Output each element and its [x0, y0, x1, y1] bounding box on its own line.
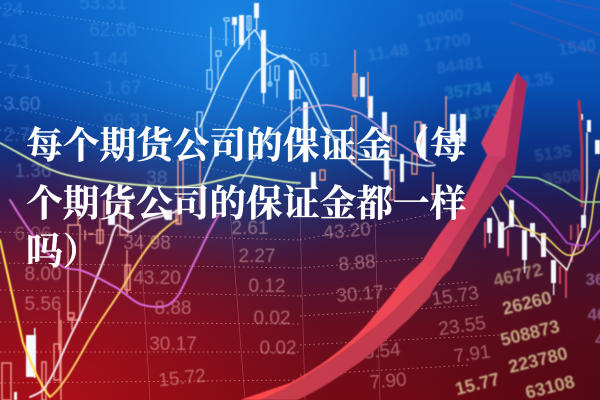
blurred blue table figures: 17700: [422, 30, 472, 55]
bright volume figures: 223780: [506, 343, 570, 377]
faint market numbers: red zone: 7.91: [452, 342, 492, 367]
line: magenta: [10, 200, 220, 307]
faint market numbers: red zone: 15.73: [430, 283, 480, 310]
faint market numbers: red zone: 8.88: [155, 298, 191, 319]
faint market numbers: red zone: 30.17: [336, 282, 385, 307]
title: [26, 125, 466, 272]
blurred blue table figures: 35734: [443, 78, 493, 103]
blurred blue table figures: 1540: [557, 35, 597, 60]
faint market numbers: red zone: 34.98: [123, 233, 171, 254]
bright volume figures: 15.77: [453, 369, 502, 399]
faint market numbers: blue zone: 38: [146, 168, 168, 189]
line: second white: [203, 55, 435, 183]
faint market numbers: red zone: 0.12: [249, 276, 285, 297]
blurred blue table figures: 5135: [533, 141, 573, 166]
line: right yellow: [498, 170, 600, 255]
line: right green: [505, 176, 600, 202]
faint market numbers: blue zone: 1.36: [15, 161, 51, 182]
faint market numbers: red zone: 30.17: [149, 334, 197, 355]
faint market numbers: red zone: 2.27: [239, 246, 275, 267]
faint market numbers: red zone: [15, 218, 492, 394]
bright volume figures: 46772: [491, 259, 545, 291]
faint market numbers: red zone: 8.88: [338, 251, 376, 276]
outlined blue candles: [197, 15, 300, 144]
rising red arrow: [240, 72, 527, 400]
arrow shaft bright face: [240, 155, 505, 400]
arrow shaft dark face: [260, 158, 515, 400]
title: 个期货公司的保证金都一样: [26, 183, 466, 224]
red candles: [2, 50, 446, 400]
faint market numbers: blue zone: 2.70: [4, 125, 40, 146]
faint market numbers: red zone: 23.55: [437, 313, 487, 340]
faint market numbers: blue zone: 3.60: [4, 94, 40, 115]
faint market numbers: red zone: 0.02: [254, 308, 290, 329]
blurred blue table figures: 3508: [542, 165, 582, 190]
faint market numbers: blue zone: 1.67: [105, 78, 141, 99]
line: right white: [492, 133, 587, 270]
faint market numbers: blue zone: 96.31: [103, 111, 151, 132]
line: pale green upper left: [0, 143, 300, 187]
line: third white: [240, 107, 300, 183]
bright volume figures: 508873: [498, 316, 562, 350]
line: yellow: [0, 240, 50, 397]
faint market numbers: red zone: 5.56: [25, 294, 61, 315]
faint market numbers: red zone: 0.02: [260, 338, 296, 359]
arrow head: [481, 72, 517, 158]
faint market numbers: blue zone: 7.1: [7, 62, 33, 83]
faint market numbers: red zone: 43.20: [133, 268, 181, 289]
faint market numbers: red zone: 7.90: [369, 369, 407, 394]
blurred blue table figures: 11.48: [366, 40, 410, 65]
faint market numbers: red zone: 8.00: [25, 264, 61, 285]
faint market numbers: blue zone: 1.44: [92, 49, 129, 70]
faint market numbers: blue zone: [2, 0, 330, 189]
line: pale white peak: [200, 30, 372, 178]
blurred blue table figures: 10000: [415, 5, 465, 30]
blurred blue table figures: [366, 5, 597, 190]
title: 吗）: [26, 231, 99, 272]
faint market numbers: red zone: 43.20: [323, 219, 372, 244]
bright volume figures: [453, 259, 600, 400]
faint market numbers: red zone: 5.54: [363, 339, 402, 364]
faint market numbers: red zone: 6.06: [15, 224, 51, 245]
pink streaks, upper right: [510, 0, 600, 55]
faint market numbers: blue zone: .61: [304, 50, 330, 71]
blurred blue table figures: 84481: [435, 53, 485, 78]
line: pink upper: [300, 105, 433, 163]
bright volume figures: 26260: [500, 287, 554, 319]
blurred blue table figures: 41373: [452, 101, 502, 126]
line: white lower: [30, 210, 180, 397]
faint market numbers: blue zone: 62.66: [89, 20, 137, 41]
faint market numbers: red zone: 15.72: [157, 366, 207, 391]
blurred blue table figures: 3.35: [519, 69, 555, 92]
faint market numbers: blue zone: 24: [2, 0, 24, 21]
line: right magenta: [503, 183, 600, 245]
faint market numbers: blue zone: 43: [7, 32, 29, 53]
faint market numbers: red zone: 2.61: [232, 218, 268, 239]
title: 每个期货公司的保证金（每: [26, 125, 466, 166]
